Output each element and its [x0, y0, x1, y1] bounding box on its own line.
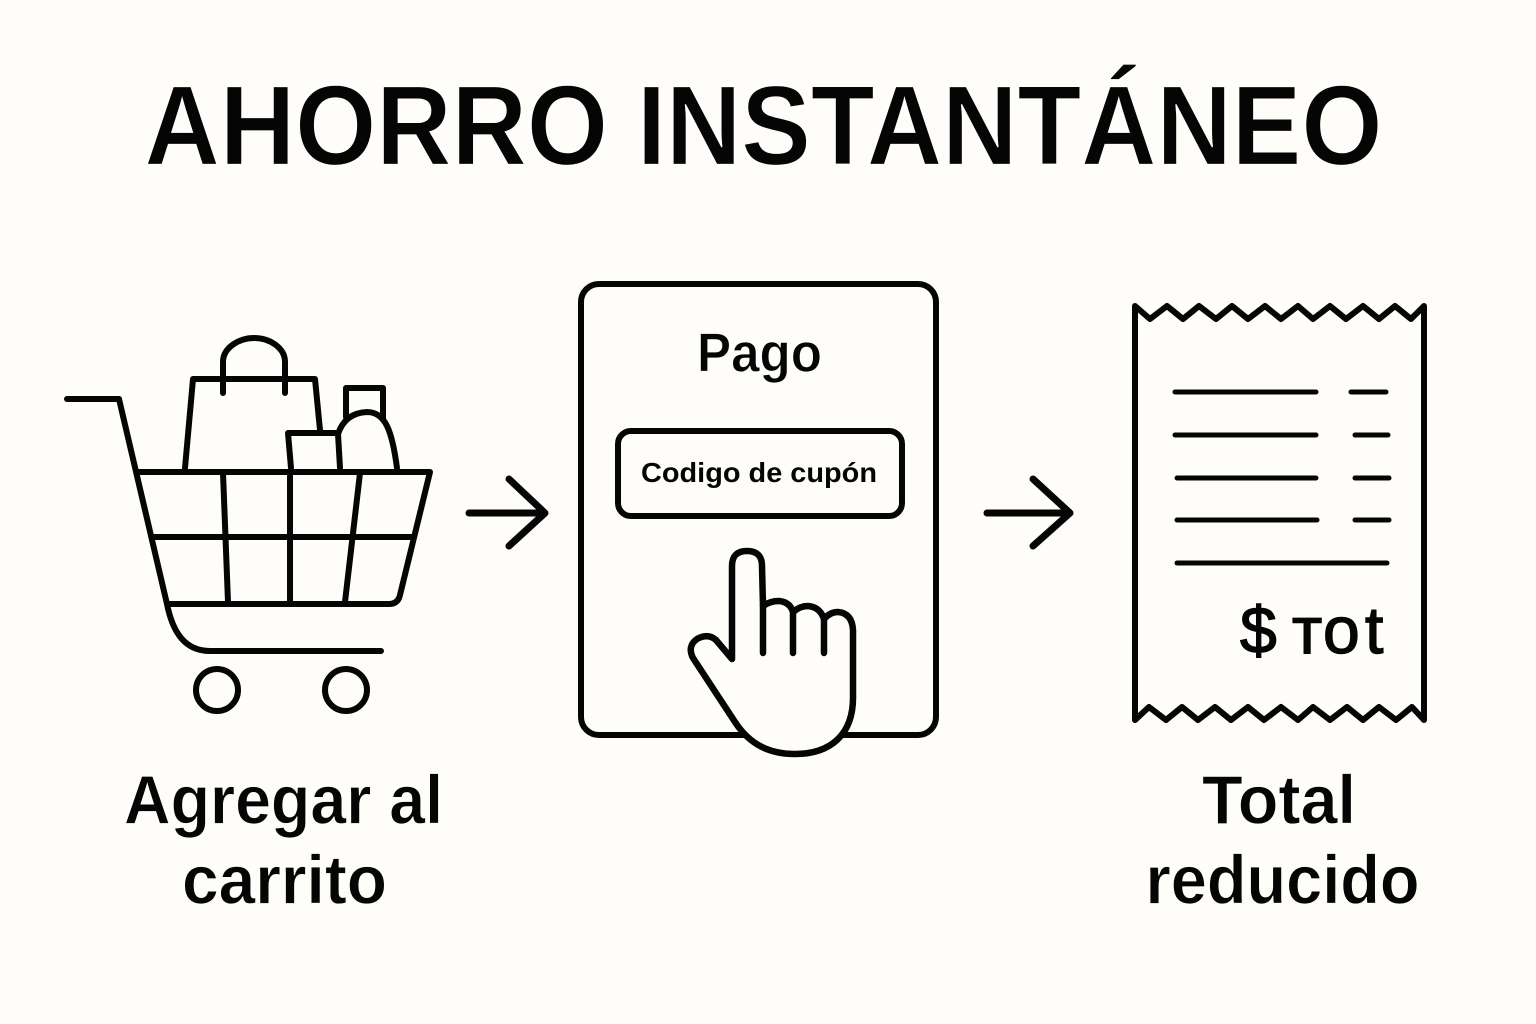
- receipt line items: [1175, 392, 1389, 563]
- payment heading: Pago: [697, 321, 822, 383]
- caption: reduced total: reducido: [1146, 841, 1420, 918]
- receipt total: $тot: [1240, 593, 1383, 667]
- arrow: cart to payment: [469, 479, 545, 546]
- coupon code field: [618, 431, 902, 516]
- caption: reduced total: [1146, 761, 1420, 918]
- icon: shopping cart: [67, 338, 430, 711]
- caption: add to cart: carrito: [182, 841, 387, 918]
- coupon code field: Codigo de cupón: [641, 457, 877, 488]
- caption: add to cart: Agregar al: [124, 761, 443, 838]
- arrow: payment to receipt: [987, 479, 1070, 546]
- panel: payment: [581, 284, 936, 754]
- receipt outline: [1135, 306, 1424, 720]
- payment card outline: [581, 284, 936, 735]
- panel: receipt: [1135, 306, 1424, 720]
- icon: pointing hand: [691, 551, 853, 754]
- caption: reduced total: Total: [1202, 761, 1356, 838]
- title: AHORRO INSTANTÁNEO: [144, 63, 1382, 189]
- caption: add to cart: [124, 761, 443, 918]
